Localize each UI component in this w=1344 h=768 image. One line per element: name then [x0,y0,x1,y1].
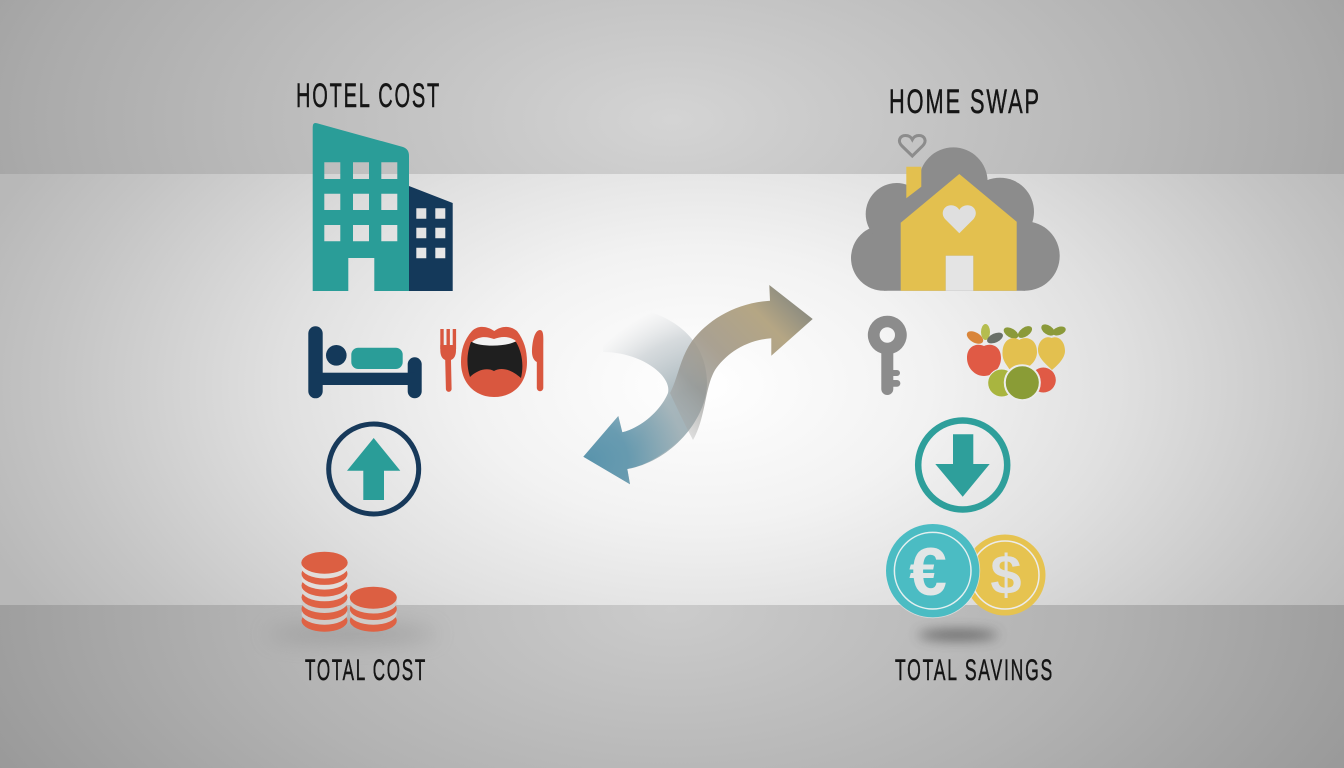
shadow under savings coins [918,630,998,640]
icon: hotel building [313,123,453,291]
arrow: tan outgoing [670,285,813,440]
icon: euro coin [885,523,980,618]
icon: cost up arrow in circle [329,424,419,514]
icon: small heart above chimney [899,136,925,156]
heading: home swap: HOME SWAP [889,83,1041,121]
icon: dollar coin [964,534,1046,616]
icon: fruit group [965,322,1067,400]
icon: savings down arrow in circle [918,420,1007,510]
label: total cost: TOTAL COST [305,654,427,687]
icon: bed [308,326,422,398]
icon: yellow house [901,167,1017,291]
heading: hotel cost: HOTEL COST [296,77,441,115]
icon: key [868,316,907,395]
icon: cloud behind house [851,147,1060,291]
icon: fork, mouth and knife [440,327,543,397]
icon: coin stacks [301,552,397,632]
arrow: blue returning [583,305,707,484]
shadow under cost coins [267,627,437,641]
icon: euro coin: € [909,534,947,610]
icon: dollar coin: $ [990,543,1022,606]
exchange arrows [583,285,813,484]
label: total savings: TOTAL SAVINGS [895,654,1054,687]
